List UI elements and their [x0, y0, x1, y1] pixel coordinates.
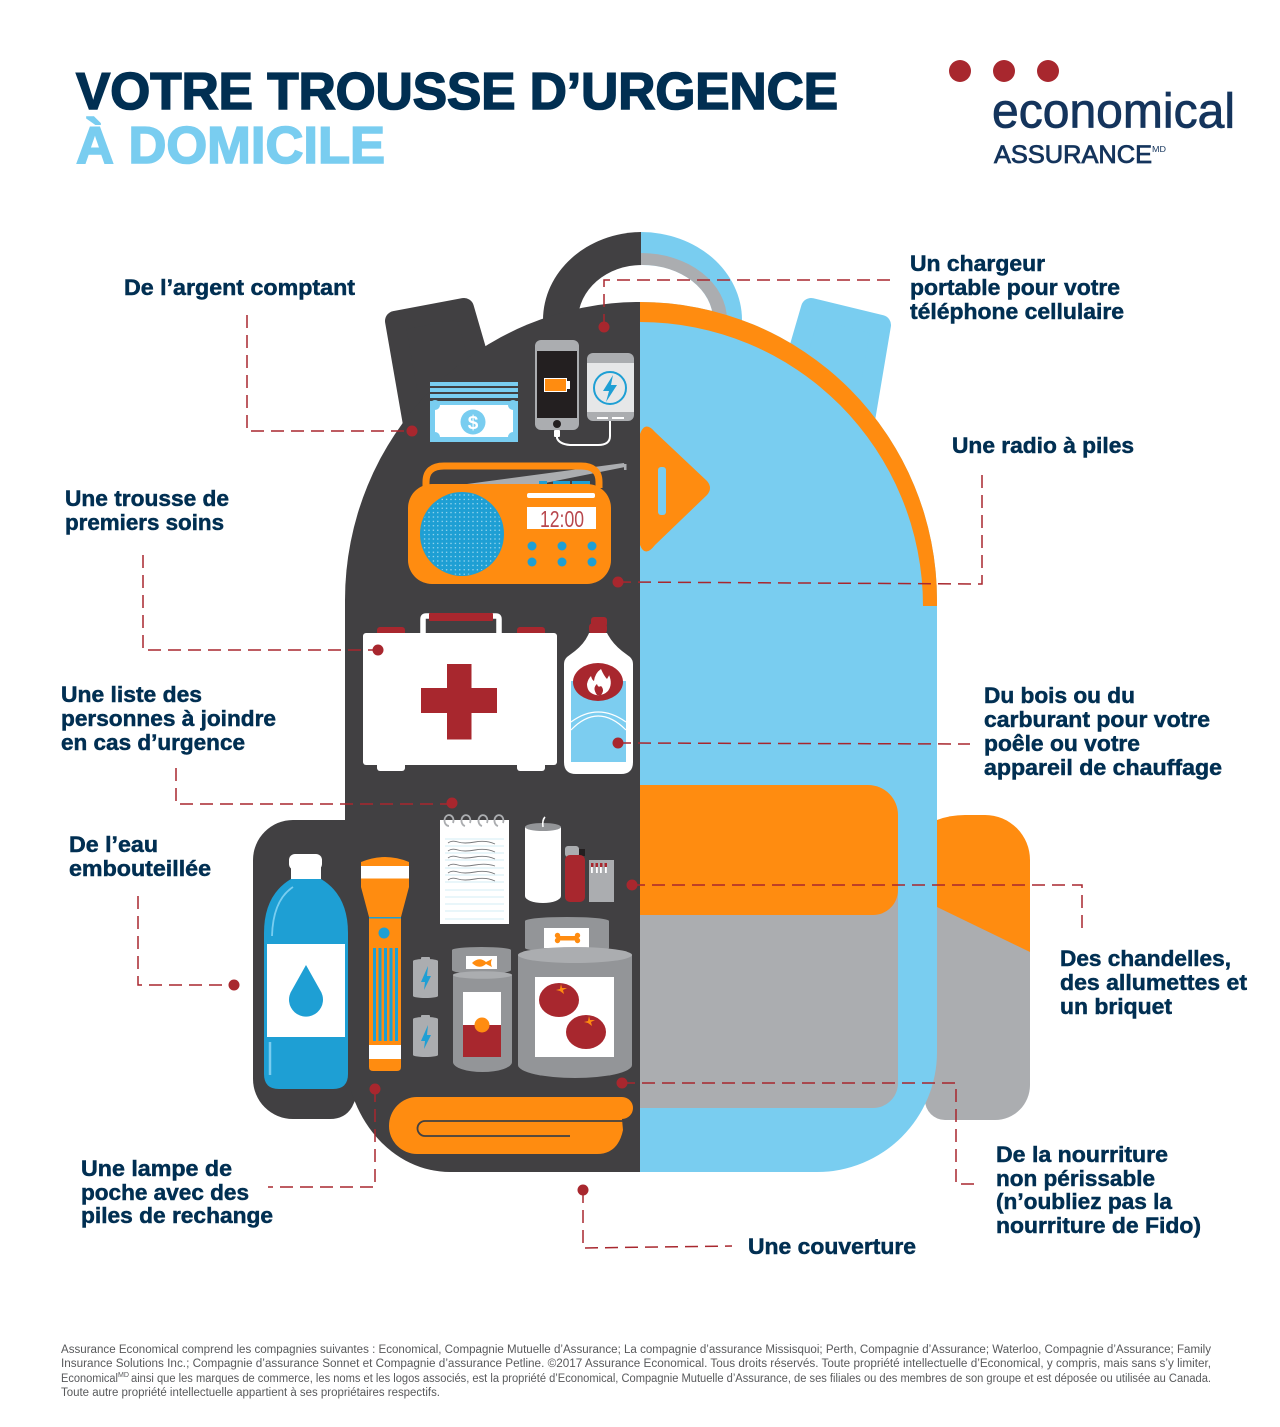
straps: [395, 308, 881, 430]
leader: fuel: [612, 738, 970, 748]
callout leaders: [138, 280, 1082, 1248]
leader: flashlight: [268, 1084, 380, 1187]
label: bottled water: embouteillée: [69, 856, 211, 881]
icon: dog bone: [555, 933, 580, 943]
logo: economical assurance: [949, 60, 1235, 169]
legal footer: Assurance Economical comprend les compagnies suivantes : Economical, Compagnie Mutuelle d’Assurance; La compagnie d’assurance Missisquoi; Perth, Compagnie d’Assurance; Waterloo, Compagnie d’Assurance; Family: [61, 1344, 1211, 1356]
leader: blanket: [578, 1184, 732, 1248]
label: candles, matches, lighter: Des chandelles,: [1060, 946, 1231, 971]
leader: food: [616, 1078, 980, 1184]
label: candles, matches, lighter: un briquet: [1060, 994, 1173, 1019]
label: contact list: en cas d’urgence: [61, 730, 245, 755]
label: blanket: Une couverture: [748, 1234, 916, 1259]
icon: folded blanket: [389, 1097, 633, 1154]
icon: spare batteries: [413, 957, 438, 1057]
side pocket: [925, 815, 1030, 1120]
label: bottled water: De l’eau: [69, 832, 158, 857]
label: flashlight: [81, 1156, 273, 1228]
label: first aid kit: premiers soins: [65, 510, 224, 535]
label: portable charger: Un chargeur: [910, 251, 1045, 276]
icon: small food cans: [452, 947, 512, 1072]
leader: cash: [247, 315, 418, 436]
label: non-perishable food: (n’oubliez pas la: [996, 1189, 1173, 1214]
icon: flashlight: [361, 857, 409, 1071]
icon: contact list notepad: [440, 815, 509, 924]
logo: economical assurance: MD: [1152, 145, 1166, 154]
icon: lighter: [565, 846, 585, 902]
leader: candles: [626, 880, 1082, 935]
logo: economical assurance: ASSURANCE: [994, 141, 1152, 169]
label: first aid kit: Une trousse de: [65, 486, 229, 511]
label: bottled water: [69, 832, 211, 881]
zipper tab: [640, 426, 710, 552]
label: non-perishable food: De la nourriture: [996, 1142, 1168, 1167]
label: portable charger: portable pour votre: [910, 275, 1120, 300]
label: flashlight: piles de rechange: [81, 1203, 273, 1228]
icon: phone and power bank: [535, 340, 634, 445]
handle: [543, 232, 742, 320]
label: cash: De l’argent comptant: [124, 275, 356, 300]
label: contact list: [61, 682, 276, 755]
icon: water bottle: [264, 854, 348, 1089]
label: candles, matches, lighter: des allumettes et: [1060, 970, 1248, 995]
front pocket: [640, 785, 898, 1108]
icon: fuel bottle: [564, 617, 633, 774]
label: flashlight: poche avec des: [81, 1180, 249, 1205]
icon: matches: [589, 860, 614, 902]
leader: water: [138, 896, 240, 990]
label: wood or fuel: Du bois ou du: [984, 683, 1135, 708]
title: À DOMICILE: [76, 117, 385, 175]
icon: radio: [408, 463, 626, 584]
icon: candle: [525, 817, 561, 903]
label: candles, matches, lighter: [1060, 946, 1248, 1019]
legal footer: Insurance Solutions Inc.; Compagnie d’assurance Sonnet et Compagnie d’assurance Petline. ©2017 Assurance Economical. Tous droits réservés. Toute propriété intellectuelle d’Economical, y compris, mais sans s’y limiter,: [61, 1358, 1211, 1370]
legal footer: Toute autre propriété intellectuelle appartient à ses propriétaires respectifs.: [61, 1387, 440, 1399]
label: contact list: personnes à joindre: [61, 706, 276, 731]
label: non-perishable food: nourriture de Fido): [996, 1213, 1201, 1238]
orange zipper arc: [640, 302, 937, 606]
backpack body: [345, 302, 937, 1172]
label: wood or fuel: [984, 683, 1222, 780]
icon: large food cans: [518, 917, 632, 1078]
backpack: [253, 232, 1030, 1172]
label: first aid kit: [65, 486, 229, 535]
label: portable charger: [910, 251, 1124, 324]
label: contact list: Une liste des: [61, 682, 202, 707]
legal footer: Economical: [61, 1373, 118, 1385]
label: flashlight: Une lampe de: [81, 1156, 232, 1181]
icon: cash: $: [468, 413, 479, 434]
legal footer: MD: [118, 1372, 129, 1379]
leader: charger: [598, 280, 890, 332]
label: wood or fuel: appareil de chauffage: [984, 755, 1222, 780]
logo: economical assurance: economical: [992, 84, 1235, 138]
title: VOTRE TROUSSE D’URGENCE: [76, 63, 838, 121]
label: non-perishable food: non périssable: [996, 1166, 1155, 1191]
legal footer: ainsi que les marques de commerce, les noms et les logos associés, est la propriété d’Economical, Compagnie Mutuelle d’Assurance, de ses filiales ou des membres de son groupe et est déposée ou utilisée au Canada.: [131, 1373, 1211, 1385]
label: wood or fuel: poêle ou votre: [984, 731, 1140, 756]
title: [76, 63, 838, 175]
icon: cash: [430, 382, 518, 442]
leader: radio: [612, 470, 982, 588]
icon: radio: 12:00: [540, 506, 584, 532]
label: radio: Une radio à piles: [952, 433, 1134, 458]
water bottle pocket: [253, 820, 360, 1119]
legal footer: [61, 1344, 1211, 1399]
icon: first aid kit: [363, 613, 557, 771]
label: portable charger: téléphone cellulaire: [910, 299, 1124, 324]
label: wood or fuel: carburant pour votre: [984, 707, 1210, 732]
leader: contact list: [176, 768, 458, 808]
leader: first aid: [143, 555, 384, 656]
label: non-perishable food: [996, 1142, 1201, 1238]
